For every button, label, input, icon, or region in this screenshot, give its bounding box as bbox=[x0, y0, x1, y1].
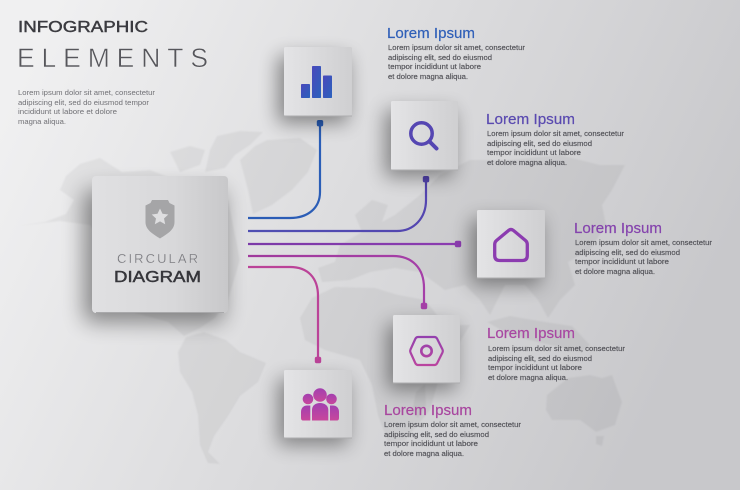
body 1 bbox=[388, 43, 526, 81]
icon: group of people bbox=[301, 388, 339, 420]
body 2: adipiscing elit, sed do eiusmod bbox=[487, 139, 592, 148]
intro text: adipiscing elit, sed do eiusmod tempor bbox=[18, 98, 150, 107]
heading 2: Lorem Ipsum bbox=[486, 112, 575, 128]
body 1: adipiscing elit, sed do eiusmod bbox=[388, 53, 492, 62]
connector: magenta bbox=[248, 256, 427, 309]
body 3 bbox=[575, 238, 713, 276]
body 4: tempor incididunt ut labore bbox=[488, 363, 582, 372]
body 4: et dolore magna aliqua. bbox=[488, 373, 568, 382]
icon: shield with star bbox=[146, 200, 174, 238]
heading: infographic: INFOGRAPHIC bbox=[18, 19, 148, 36]
icon: hexagon nut bbox=[410, 337, 443, 365]
main card: circular diagram bbox=[84, 176, 228, 322]
connector: indigo bbox=[248, 176, 429, 231]
card 5: people bbox=[278, 370, 352, 445]
card 3: home bbox=[471, 210, 545, 285]
icon: bars bbox=[301, 66, 332, 98]
icon: house bbox=[495, 230, 527, 260]
body 4: adipiscing elit, sed do eiusmod bbox=[488, 354, 592, 363]
body 4 bbox=[488, 344, 626, 382]
text block 1 bbox=[387, 26, 526, 81]
body 5: et dolore magna aliqua. bbox=[384, 449, 464, 458]
intro text: incididunt ut labore et dolore bbox=[18, 107, 117, 116]
connector: pink bbox=[248, 267, 321, 363]
body 1: Lorem ipsum dolor sit amet, consectetur bbox=[388, 43, 526, 52]
body 2 bbox=[487, 129, 625, 167]
body 5: adipiscing elit, sed do eiusmod bbox=[384, 430, 489, 439]
body 3: adipiscing elit, sed do eiusmod bbox=[575, 248, 680, 257]
heading 5: Lorem Ipsum bbox=[384, 403, 472, 419]
heading: elements: ELEMENTS bbox=[17, 43, 208, 73]
intro text: Lorem ipsum dolor sit amet, consectetur bbox=[18, 88, 156, 97]
body 3: Lorem ipsum dolor sit amet, consectetur bbox=[575, 238, 713, 247]
body 5: tempor incididunt ut labore bbox=[384, 439, 478, 448]
card 1: bar chart bbox=[278, 47, 352, 123]
text block 2 bbox=[486, 112, 625, 167]
world map bbox=[17, 131, 625, 464]
intro text: magna aliqua. bbox=[18, 117, 66, 126]
connector: blue bbox=[248, 120, 323, 218]
label: diagram: DIAGRAM bbox=[114, 269, 201, 286]
connector: purple bbox=[248, 241, 461, 247]
intro text bbox=[18, 88, 156, 126]
body 1: et dolore magna aliqua. bbox=[388, 72, 468, 81]
text block 3 bbox=[574, 221, 713, 276]
body 3: et dolore magna aliqua. bbox=[575, 267, 655, 276]
body 3: tempor incididunt ut labore bbox=[575, 257, 669, 266]
body 5 bbox=[384, 420, 522, 458]
heading 4: Lorem Ipsum bbox=[487, 326, 575, 342]
label: circular: CIRCULAR bbox=[117, 251, 198, 266]
body 2: Lorem ipsum dolor sit amet, consectetur bbox=[487, 129, 625, 138]
card 2: search bbox=[385, 101, 458, 177]
body 5: Lorem ipsum dolor sit amet, consectetur bbox=[384, 420, 522, 429]
heading 3: Lorem Ipsum bbox=[574, 221, 662, 237]
body 2: et dolore magna aliqua. bbox=[487, 158, 567, 167]
card 4: hex nut bbox=[387, 315, 460, 390]
connector lines bbox=[248, 120, 461, 363]
text block 4 bbox=[487, 326, 626, 382]
body 1: tempor incididunt ut labore bbox=[388, 62, 481, 71]
heading 1: Lorem Ipsum bbox=[387, 26, 475, 42]
body 2: tempor incididunt ut labore bbox=[487, 148, 581, 157]
text block 5 bbox=[384, 403, 522, 458]
body 4: Lorem ipsum dolor sit amet, consectetur bbox=[488, 344, 626, 353]
icon: magnifier bbox=[411, 123, 436, 148]
